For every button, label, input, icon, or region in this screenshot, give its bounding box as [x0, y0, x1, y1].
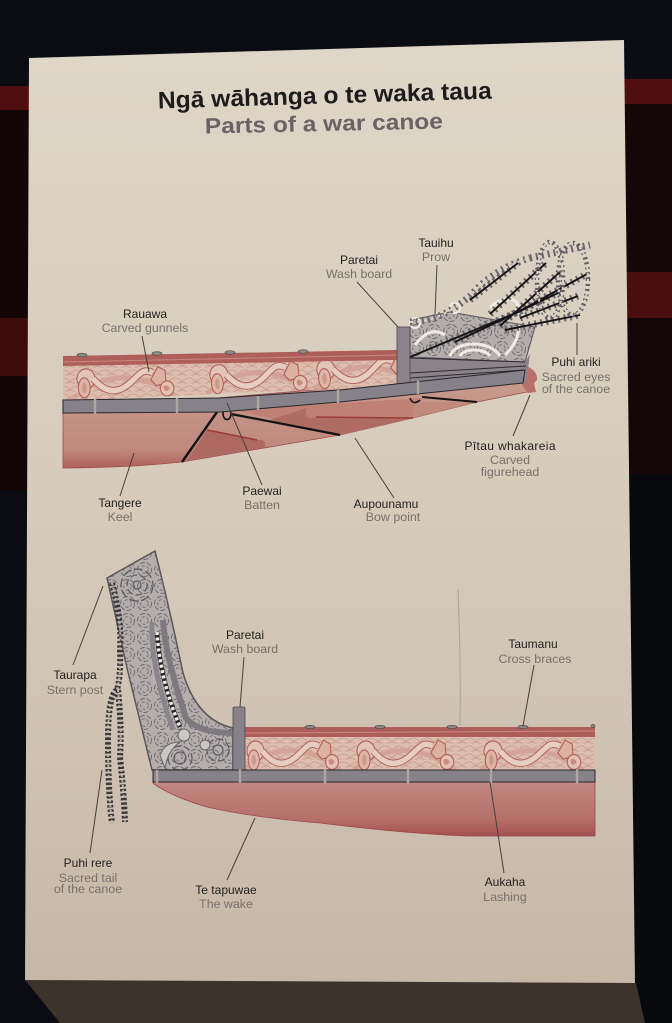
leader line: Tangere [120, 453, 134, 496]
label: Pītau whakareia: Carved [490, 453, 530, 467]
label: Taurapa: Taurapa [53, 668, 97, 682]
label: Taurapa: Stern post [47, 683, 104, 697]
leader line: Rauawa [142, 336, 149, 372]
wash board upright [397, 327, 410, 384]
hull: keel and bow point [63, 372, 532, 468]
leader line: Taumanu [523, 665, 534, 726]
label: Paretai stern: Paretai [226, 628, 264, 642]
wash board upright [233, 707, 245, 771]
label: Pītau whakareia: Pītau whakareia [464, 439, 556, 453]
label: Aukaha: Aukaha [485, 875, 526, 889]
carved gunnels [244, 724, 595, 770]
label: Pītau whakareia: figurehead [481, 465, 539, 479]
dark carved hull sections [187, 398, 477, 460]
label: Rauawa [102, 307, 188, 335]
label: Puhi rere [54, 856, 122, 896]
label: Taumanu [498, 637, 572, 666]
label: Aupounamu: Aupounamu [354, 497, 418, 511]
title: Ngā wāhanga o te waka taua [157, 78, 493, 114]
label: Tangere [98, 496, 142, 524]
label: Rauawa: Carved gunnels [102, 321, 188, 335]
label: Paretai bow: Wash board [326, 267, 392, 281]
label: Paewai: Batten [244, 498, 280, 512]
leader line: Pītau whakareia [513, 395, 530, 436]
label: Paewai [242, 484, 282, 512]
prow carved panel [410, 312, 535, 362]
label: Taumanu: Cross braces [498, 652, 572, 666]
label: Tangere: Tangere [98, 496, 142, 510]
prow lower boards [410, 354, 530, 390]
figurehead [522, 365, 537, 393]
label: Aukaha [483, 875, 527, 904]
leader line: Paewai [227, 403, 262, 485]
sacred tail strands [108, 583, 125, 823]
prow swirl carving [410, 299, 518, 356]
leader line: Aupounamu [355, 438, 394, 498]
inner ribbons [152, 622, 173, 730]
label: Pītau whakareia [464, 439, 556, 479]
label: Aupounamu: Bow point [366, 510, 421, 524]
black braces [182, 397, 477, 462]
diagram: stern of the canoe [107, 551, 595, 836]
leader line: Taurapa [73, 586, 103, 665]
cross-brace knobs [305, 724, 595, 729]
lower hull [153, 781, 595, 836]
diagram: bow of the canoe [63, 242, 590, 468]
label: Tauihu [418, 236, 454, 264]
label: Puhi ariki: Puhi ariki [551, 355, 601, 369]
label: Paretai bow [326, 253, 392, 281]
carved spirals [121, 569, 229, 770]
stern post [107, 551, 233, 770]
label: Taumanu: Taumanu [508, 637, 558, 651]
label: Paretai stern: Wash board [212, 642, 278, 656]
leader line: Paretai stern [240, 657, 244, 707]
label: Taurapa [47, 668, 104, 697]
label: Paewai: Paewai [242, 484, 282, 498]
leader line: Aukaha [490, 782, 504, 873]
label: Paretai bow: Paretai [340, 253, 378, 267]
batten strip [153, 769, 595, 784]
leader line: Te tapuwae [227, 818, 255, 880]
label: Puhi ariki: Sacred eyes [542, 370, 610, 384]
sacred eyes lattice [410, 242, 590, 357]
label: Puhi rere: of the canoe [54, 882, 122, 896]
leader line: Tauihu [435, 265, 437, 314]
label: Te tapuwae: The wake [199, 897, 253, 911]
label: Aupounamu [354, 497, 421, 524]
label: Puhi rere: Puhi rere [64, 856, 113, 870]
label: Tauihu: Tauihu [418, 236, 454, 250]
cross-brace knobs [77, 350, 308, 357]
label: Aukaha: Lashing [483, 890, 527, 904]
leader line: Puhi rere [90, 770, 102, 853]
batten strip [63, 370, 525, 414]
leader line: Paretai bow [357, 282, 398, 327]
title [157, 78, 493, 138]
label: Tangere: Keel [108, 510, 132, 524]
label: Te tapuwae: Te tapuwae [195, 883, 257, 897]
carved gunnels [63, 350, 417, 401]
label: Tauihu: Prow [422, 250, 450, 264]
board scratch [458, 590, 460, 725]
leader line: Puhi ariki [576, 323, 578, 355]
label: Paretai stern [212, 628, 278, 656]
label: Rauawa: Rauawa [123, 307, 167, 321]
subtitle: Parts of a war canoe [205, 109, 443, 138]
label: Puhi ariki [542, 355, 610, 396]
label: Te tapuwae [195, 883, 257, 911]
label: Puhi ariki: of the canoe [542, 382, 610, 396]
label: Puhi rere: Sacred tail [59, 871, 117, 885]
